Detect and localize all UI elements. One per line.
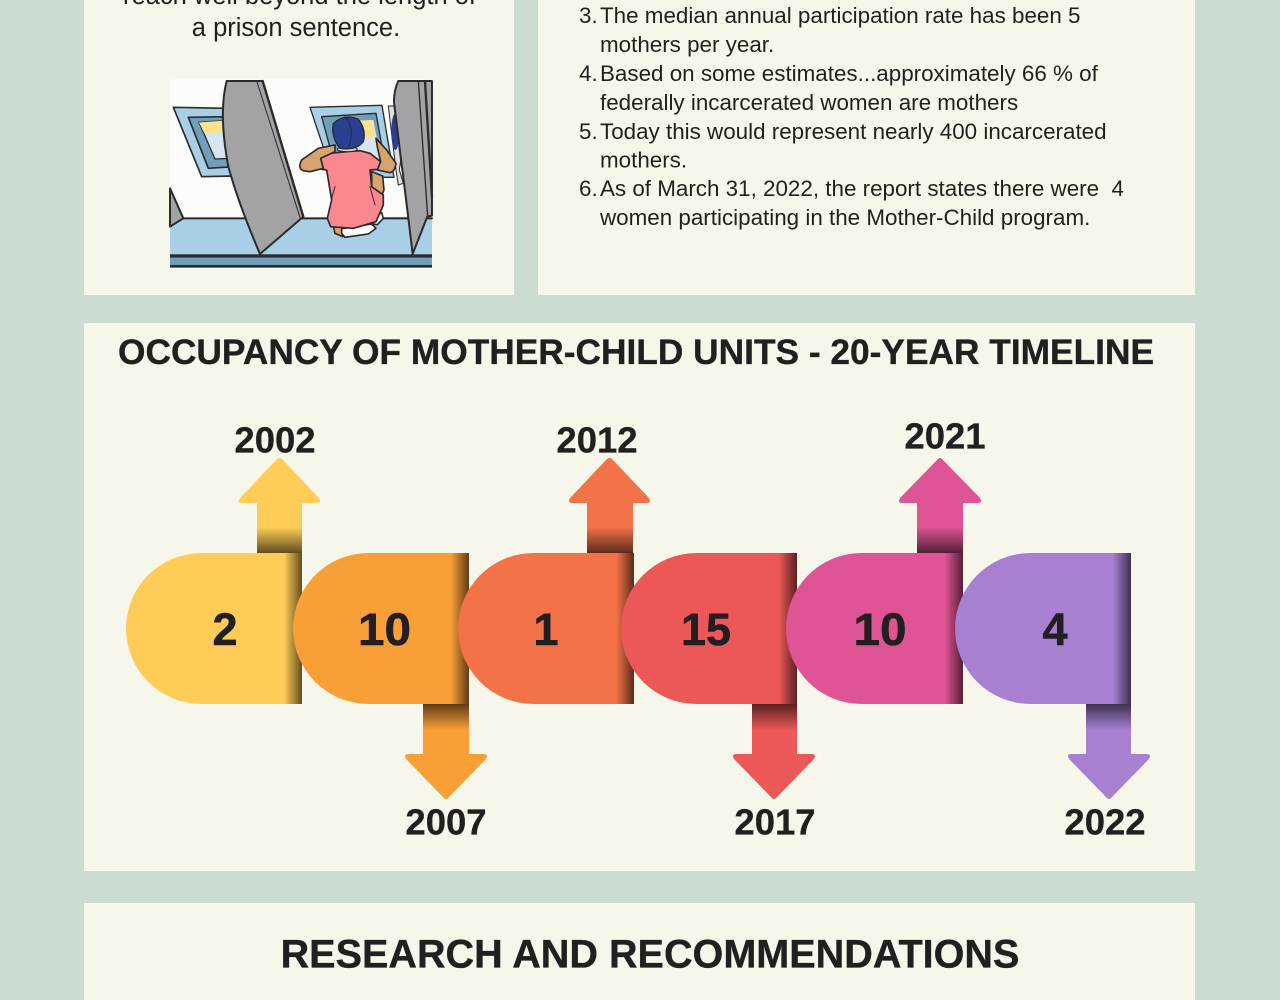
- arrow up 2021: [899, 458, 981, 553]
- fact 5: mothers.: [600, 148, 687, 172]
- timeline 2002: 2: [126, 420, 320, 704]
- panel: numbered facts: [538, 0, 1195, 295]
- fact 3: The median annual participation rate has been 5: [600, 3, 1080, 28]
- research heading: RESEARCH AND RECOMMENDATIONS: [281, 932, 1019, 976]
- value 10: 10: [854, 604, 906, 655]
- arrow up 2002: [239, 458, 320, 553]
- year 2012: 2012: [556, 420, 638, 460]
- fact 5: [579, 119, 1107, 172]
- timeline 2021: 10: [786, 416, 986, 704]
- quote text: [123, 0, 477, 42]
- arrow down 2017: [733, 704, 815, 799]
- right open door: [394, 81, 432, 254]
- timeline heading: OCCUPANCY OF MOTHER-CHILD UNITS - 20-YEAR TIMELINE: [118, 333, 1154, 372]
- fact 6: [579, 176, 1124, 230]
- segment 2022: [955, 553, 1131, 704]
- panel: occupancy timeline: [84, 323, 1195, 871]
- illustration: woman crouching at cell door: [170, 79, 432, 269]
- segment 2017: [621, 553, 797, 704]
- fact 5: Today this would represent nearly 400 incarcerated: [600, 119, 1107, 144]
- panel: research and recommendations: [84, 903, 1195, 1000]
- fact 3: [579, 3, 1080, 57]
- segment 2007: [293, 553, 469, 704]
- segment 2021: [786, 553, 963, 704]
- fact 6: As of March 31, 2022, the report states there were 4: [600, 176, 1124, 201]
- value 10: 10: [358, 604, 411, 655]
- fact 5: 5.: [579, 119, 598, 144]
- timeline 2007: 10: [293, 553, 487, 842]
- year 2002: 2002: [234, 420, 316, 460]
- arrow down 2022: [1068, 704, 1150, 799]
- fact 6: women participating in the Mother-Child program.: [599, 205, 1090, 230]
- quote text: a prison sentence.: [192, 14, 400, 42]
- fact 4: [579, 61, 1099, 115]
- person at window: [300, 105, 403, 237]
- fact 4: Based on some estimates...approximately 66 % of: [600, 61, 1099, 86]
- arrow down 2007: [405, 704, 487, 799]
- left cell window: [173, 107, 234, 177]
- timeline 2017: 15: [621, 553, 816, 842]
- timeline 2022: 4: [955, 553, 1150, 842]
- segment 2012: [458, 553, 634, 704]
- segment 2002: [126, 553, 302, 704]
- fact 3: 3.: [579, 3, 598, 28]
- value 15: 15: [681, 604, 731, 655]
- fact 6: 6.: [579, 176, 598, 201]
- fact 4: federally incarcerated women are mothers: [600, 90, 1018, 115]
- value 4: 4: [1042, 604, 1068, 655]
- panel: prison sentence quote: [84, 0, 514, 295]
- fact 3: mothers per year.: [600, 32, 774, 57]
- left open door: [223, 81, 303, 254]
- value 2: 2: [212, 604, 238, 655]
- year 2022: 2022: [1064, 802, 1146, 842]
- year 2021: 2021: [904, 416, 986, 456]
- value 1: 1: [533, 604, 559, 655]
- fact 4: 4.: [579, 61, 598, 86]
- year 2017: 2017: [734, 802, 816, 842]
- timeline 2012: 1: [458, 420, 650, 704]
- year 2007: 2007: [405, 802, 487, 842]
- arrow up 2012: [569, 458, 650, 553]
